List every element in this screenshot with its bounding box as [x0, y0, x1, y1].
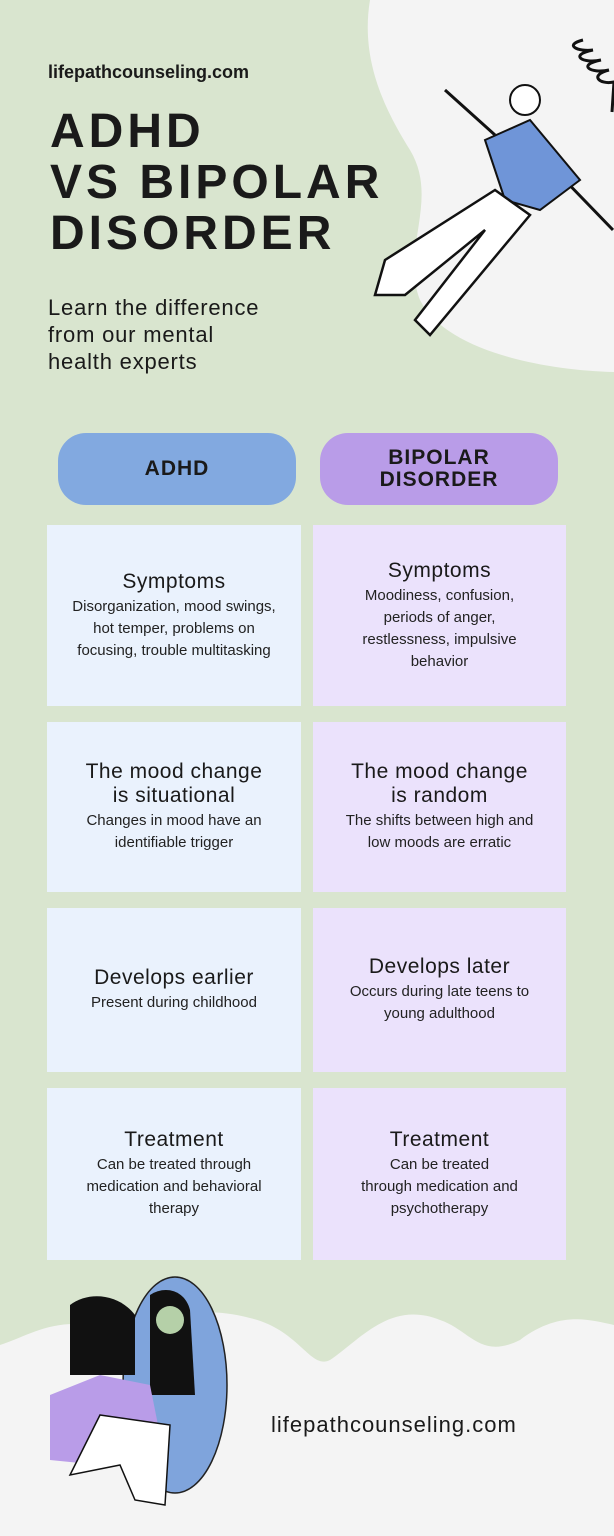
website top: lifepathcounseling.com: [48, 62, 249, 82]
panel: ADHD onset: Develops earlier: [94, 966, 254, 989]
illustration: lying man: [373, 38, 614, 337]
panel: Bipolar mood: low moods are erratic: [368, 834, 511, 851]
panel: ADHD mood: is situational: [113, 784, 235, 807]
panel: ADHD symptoms: focusing, trouble multitasking: [77, 642, 271, 658]
panel: ADHD onset: [47, 908, 301, 1072]
panel: ADHD symptoms: Symptoms: [122, 570, 226, 592]
panel: Bipolar treatment: psychotherapy: [391, 1200, 488, 1217]
panel: Bipolar onset: Develops later: [369, 955, 510, 978]
panel: Bipolar treatment: Can be treated: [390, 1156, 489, 1173]
subtitle: from our mental: [48, 322, 214, 347]
panel: Bipolar mood: [313, 722, 566, 892]
header pill: Bipolar: BIPOLAR: [388, 446, 490, 469]
header pill: Bipolar: DISORDER: [380, 468, 498, 491]
panel: ADHD treatment: therapy: [149, 1200, 199, 1217]
panel: ADHD treatment: medication and behavioral: [86, 1178, 262, 1195]
title: [50, 105, 383, 260]
panel: Bipolar onset: [313, 908, 566, 1072]
panel: Bipolar symptoms: [313, 525, 566, 706]
panel: Bipolar symptoms: Symptoms: [388, 558, 491, 582]
panel: Bipolar mood: The shifts between high and: [346, 812, 533, 829]
subtitle: [48, 295, 259, 374]
panel: Bipolar symptoms: Moodiness, confusion,: [365, 586, 514, 604]
panel: ADHD treatment: Can be treated through: [97, 1156, 251, 1173]
panel: Bipolar symptoms: restlessness, impulsive: [362, 630, 517, 648]
title: ADHD: [50, 105, 205, 158]
website bottom: lifepathcounseling.com: [271, 1412, 517, 1437]
subtitle: Learn the difference: [48, 295, 259, 320]
title: VS BIPOLAR: [50, 156, 383, 209]
panel: ADHD mood: identifiable trigger: [115, 834, 233, 851]
panel: ADHD symptoms: [47, 525, 301, 706]
title: DISORDER: [50, 207, 335, 260]
header pill: ADHD: ADHD: [145, 457, 209, 480]
panel: Bipolar mood: The mood change: [351, 760, 528, 783]
panel: Bipolar treatment: Treatment: [390, 1128, 489, 1151]
header pill: ADHD: [58, 433, 296, 505]
panel: Bipolar treatment: [313, 1088, 566, 1260]
panel: ADHD mood: The mood change: [86, 760, 262, 783]
panel: ADHD treatment: [47, 1088, 301, 1260]
panel: ADHD mood: [47, 722, 301, 892]
header pill: Bipolar: [320, 433, 558, 505]
panel: Bipolar symptoms: behavior: [411, 652, 468, 670]
panel: ADHD treatment: Treatment: [124, 1128, 224, 1151]
panel: Bipolar symptoms: periods of anger,: [384, 608, 495, 626]
panel: Bipolar onset: Occurs during late teens to: [350, 983, 529, 1000]
panel: ADHD symptoms: Disorganization, mood swings,: [72, 598, 276, 614]
panel: Bipolar treatment: through medication and: [361, 1178, 518, 1195]
panel: Bipolar mood: is random: [391, 784, 488, 807]
panel: ADHD mood: Changes in mood have an: [86, 812, 262, 829]
panel: Bipolar onset: young adulthood: [384, 1005, 495, 1022]
panel: ADHD onset: Present during childhood: [91, 994, 257, 1011]
panel: ADHD symptoms: hot temper, problems on: [93, 620, 255, 636]
subtitle: health experts: [48, 349, 197, 374]
illustration: girl and mirror: [50, 1276, 228, 1506]
